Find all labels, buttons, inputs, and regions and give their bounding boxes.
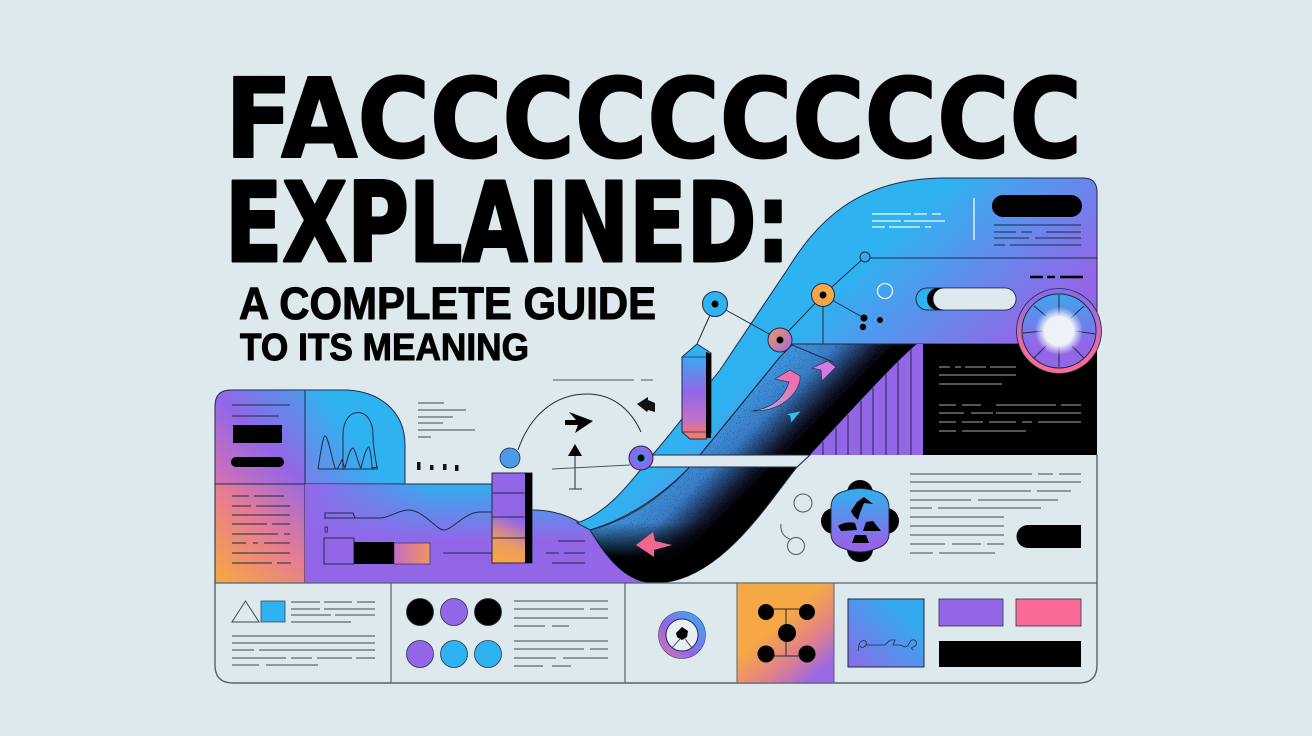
black swatch	[939, 641, 1081, 667]
small marker	[325, 527, 328, 532]
small top node	[860, 252, 870, 262]
small circles	[781, 494, 812, 554]
panel: top-left cell	[215, 390, 305, 484]
black pill	[231, 457, 284, 467]
icon: ring target	[658, 612, 706, 658]
panel: bottom-left gradient text cell	[215, 484, 305, 583]
icon: triangle	[232, 601, 259, 622]
arrow: black right arrow	[565, 412, 593, 433]
panel: top chart cell	[305, 390, 405, 484]
white ring	[878, 284, 892, 298]
panel: orange square with node diagram	[737, 583, 834, 683]
black pill top	[992, 195, 1082, 217]
text lines	[232, 602, 375, 665]
panel: shapes and text	[232, 601, 375, 665]
cell text lines	[232, 496, 291, 563]
four dots	[417, 462, 458, 471]
subtitle: A COMPLETE GUIDE	[239, 278, 656, 329]
title: FACCCCCCCCCC	[225, 55, 1082, 183]
circle grid	[406, 598, 502, 668]
chart tab	[325, 513, 355, 518]
cell text lines	[443, 541, 585, 563]
purple connector node	[552, 446, 653, 470]
icon: cyan arrow	[786, 411, 801, 423]
subtitle: TO ITS MEANING	[240, 327, 529, 369]
arrow: up arrow	[568, 444, 582, 489]
dark text lines top right	[994, 225, 1081, 245]
panel: black text block	[923, 344, 1097, 455]
icon: pink star arrow	[636, 532, 672, 557]
text lines near arrow	[553, 379, 653, 381]
icon: blue square	[261, 601, 285, 622]
blue node	[702, 292, 728, 316]
light text lines on blue	[872, 198, 974, 240]
black tag	[1016, 525, 1081, 548]
title: EXPLAINED:	[225, 159, 790, 287]
icon: pink swoosh arrow	[752, 370, 800, 411]
toggle	[916, 288, 1016, 310]
pink swatch	[1016, 599, 1081, 626]
icon: small black left arrow	[637, 397, 655, 412]
lower frame panel	[215, 455, 1097, 683]
icon: purple arrow	[812, 361, 836, 381]
divider dashes	[1030, 276, 1083, 278]
panel: main blue sweep	[577, 178, 1097, 530]
title	[225, 55, 1082, 287]
panel: dark grain sweep	[590, 344, 917, 583]
black dots	[860, 314, 883, 330]
dial	[1016, 288, 1102, 374]
subtitle	[239, 278, 656, 369]
black label	[233, 425, 282, 443]
icon: emblem	[821, 480, 899, 562]
squiggle chart	[318, 412, 378, 470]
pink node	[768, 328, 792, 352]
text lines	[514, 601, 608, 666]
purple swatch	[939, 599, 1003, 626]
connector circle and arc	[500, 394, 641, 468]
text block mid-left	[418, 403, 475, 437]
crystal column	[682, 344, 711, 439]
bottom row dividers	[215, 583, 1097, 683]
white strip	[640, 455, 810, 467]
light text lines	[939, 367, 1081, 431]
panel: blue gradient square	[848, 599, 924, 667]
panel: purple striped area	[810, 344, 923, 455]
text block right	[910, 474, 1081, 553]
panel: main lower purple-blue band	[305, 484, 665, 583]
orange node	[812, 284, 834, 306]
node network	[697, 252, 1097, 455]
column block	[492, 473, 532, 563]
stacked bars	[324, 538, 430, 564]
cell text lines	[232, 405, 290, 416]
wave line chart	[324, 510, 492, 530]
panel: circles and text	[406, 598, 608, 668]
